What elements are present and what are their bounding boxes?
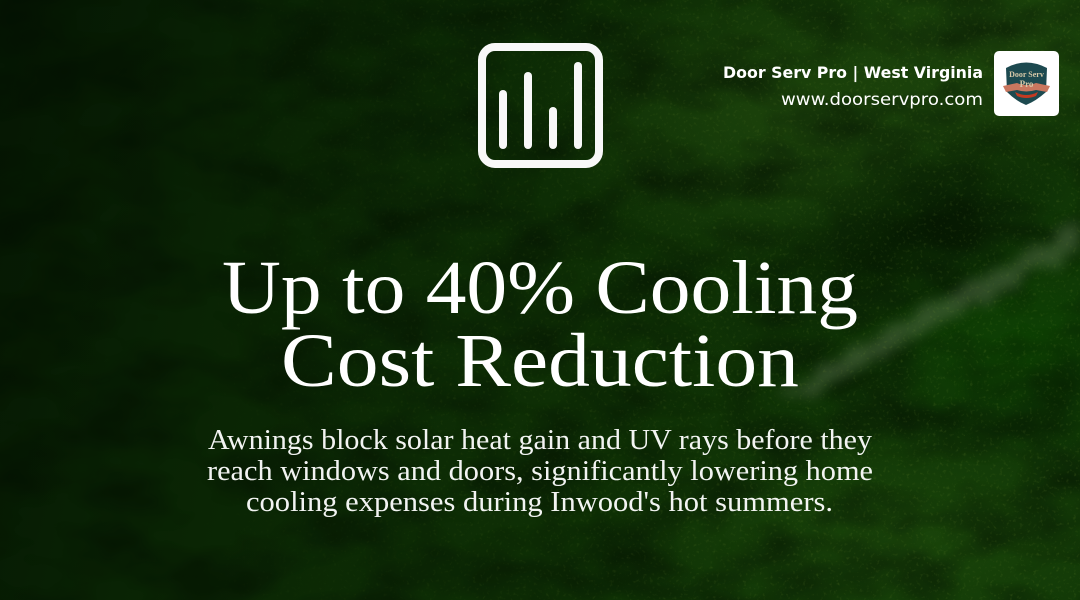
icon: bar chart in rounded square [482,47,599,164]
leaf vein highlight [780,222,1080,395]
title [222,246,858,403]
description text: Awnings block solar heat gain and UV rays before they [208,425,872,456]
brand text: Door Serv Pro | West Virginia [723,63,983,83]
description text: reach windows and doors, significantly lowering home [207,456,873,487]
brand text: www.doorservpro.com [781,90,983,109]
brand text [723,63,983,109]
logo badge [994,51,1059,116]
title: Up to 40% Cooling [222,246,858,330]
description text: cooling expenses during Inwood's hot summers. [246,487,833,518]
title: Cost Reduction [281,319,799,403]
description text [207,425,873,518]
logo badge: Pro [1020,79,1034,89]
logo badge: Door Serv [1009,70,1044,79]
